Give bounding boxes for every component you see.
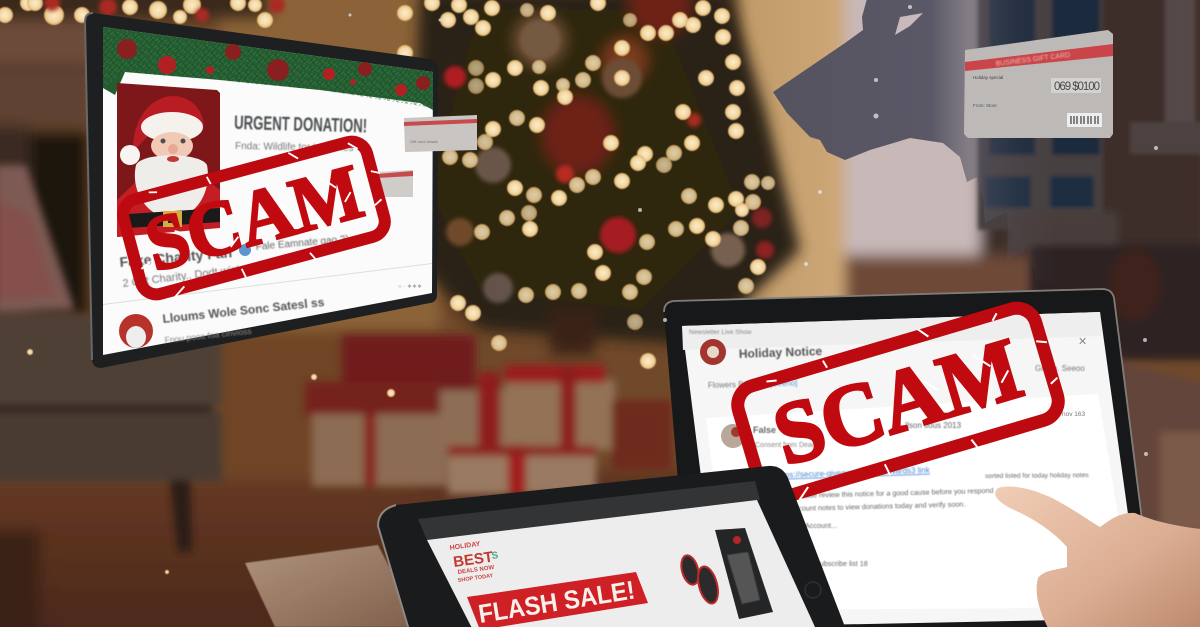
sale logo <box>449 541 499 584</box>
floating gift card: From: Store <box>973 103 997 108</box>
floating gift card <box>964 30 1113 138</box>
post divider <box>103 263 432 305</box>
tablet: charity post: 2 Cet Charity.. Dodt wistoo <box>122 262 252 290</box>
laptop: ✕ <box>1078 336 1087 348</box>
laptop: Flowers Boosted [Seeno] <box>708 379 797 390</box>
santa figure <box>117 96 220 237</box>
tablet screen <box>103 27 433 355</box>
glowing bokeh lights <box>0 0 775 607</box>
gift card red band <box>965 44 1113 71</box>
urgent donation heading: URGENT DONATION! <box>234 113 367 137</box>
laptop: False <box>753 425 776 435</box>
phishing link: https://secure-giveaway.com/rd/Wards3 link <box>776 466 931 480</box>
email body text <box>790 472 1089 568</box>
flash sale banner <box>467 572 648 627</box>
phone product <box>715 528 773 619</box>
verified badge <box>239 244 251 256</box>
laptop: Group. Seeoo <box>1035 364 1085 373</box>
email body text: Account notes to view donations today and verify soon. <box>790 499 965 513</box>
tablet: flash sale <box>378 466 850 627</box>
gift card barcode <box>1067 113 1102 127</box>
stamp: laptop scam <box>731 295 1070 511</box>
tree ornaments <box>444 20 774 303</box>
laptop <box>664 289 1142 627</box>
tablet: charity post: Fale Eamnate gao 2) <box>255 234 349 253</box>
sale logo: DEALS NOW <box>457 565 495 576</box>
tablet screen <box>427 500 822 627</box>
window panes <box>978 0 1200 230</box>
laptop sender avatar <box>700 339 726 365</box>
santa card <box>117 83 220 237</box>
hand pointing at screen <box>995 486 1200 627</box>
coffee table <box>245 545 420 627</box>
christmas tree <box>405 0 800 355</box>
email avatar <box>721 424 745 448</box>
post title: Lloums Wole Sonc Satesl ss <box>162 295 325 326</box>
sofa and cushion <box>0 165 222 552</box>
donation subtext: Fnda: Wildlife tor toy tunes <box>235 141 354 154</box>
floating gift card: 069 $0100 <box>1054 81 1100 93</box>
email card <box>706 394 1118 610</box>
email body text: sorted listed for today holiday notes <box>985 472 1089 480</box>
holly banner <box>103 27 433 110</box>
sale logo: BEST <box>452 549 494 571</box>
laptop: Newsletter Live Show <box>689 329 752 336</box>
wrapped gift boxes <box>305 335 672 495</box>
small gift card two <box>377 170 413 197</box>
email body text: Subscribe list 18 <box>815 559 868 568</box>
tablet: charity post <box>85 13 477 368</box>
small gift card one <box>404 115 477 152</box>
sale logo: S <box>491 550 499 562</box>
laptop screen <box>682 312 1128 627</box>
red baubles at top left <box>44 0 285 22</box>
email body text: Please review this notice for a good cause before you respond <box>795 486 994 500</box>
wolf eye cut-out <box>895 13 923 35</box>
stamp: laptop scam: SCAM <box>763 320 1032 485</box>
fake charity name: Fake Charity Fan <box>119 244 233 270</box>
laptop: Holiday Notice <box>739 344 823 361</box>
floating gift card: BUSINESS GIFT CARD <box>995 52 1071 68</box>
home button <box>805 582 821 598</box>
floating gift card: Holiday special <box>973 75 1003 80</box>
laptop: Consent from Dear <box>755 442 815 449</box>
sale logo: SHOP TODAY <box>457 573 494 584</box>
earbuds product <box>678 553 722 606</box>
right sofa and cushions <box>1008 212 1200 540</box>
snow specks <box>348 5 1158 456</box>
tablet: charity post: Fnou pooa foa cinvioss <box>164 326 252 345</box>
laptop: Ilson tious 2013 <box>905 421 962 430</box>
small gift card one: Gift card details <box>410 139 438 144</box>
laptop: nov 163 <box>1062 411 1086 418</box>
post avatar <box>119 314 153 348</box>
stamp: tablet scam: SCAM <box>136 147 371 288</box>
email body text: Account... <box>805 521 837 530</box>
wolf silhouette <box>773 0 1060 285</box>
tablet: charity post: ○ · ∗∗∗ <box>398 284 422 290</box>
sale logo: HOLIDAY <box>449 541 481 552</box>
